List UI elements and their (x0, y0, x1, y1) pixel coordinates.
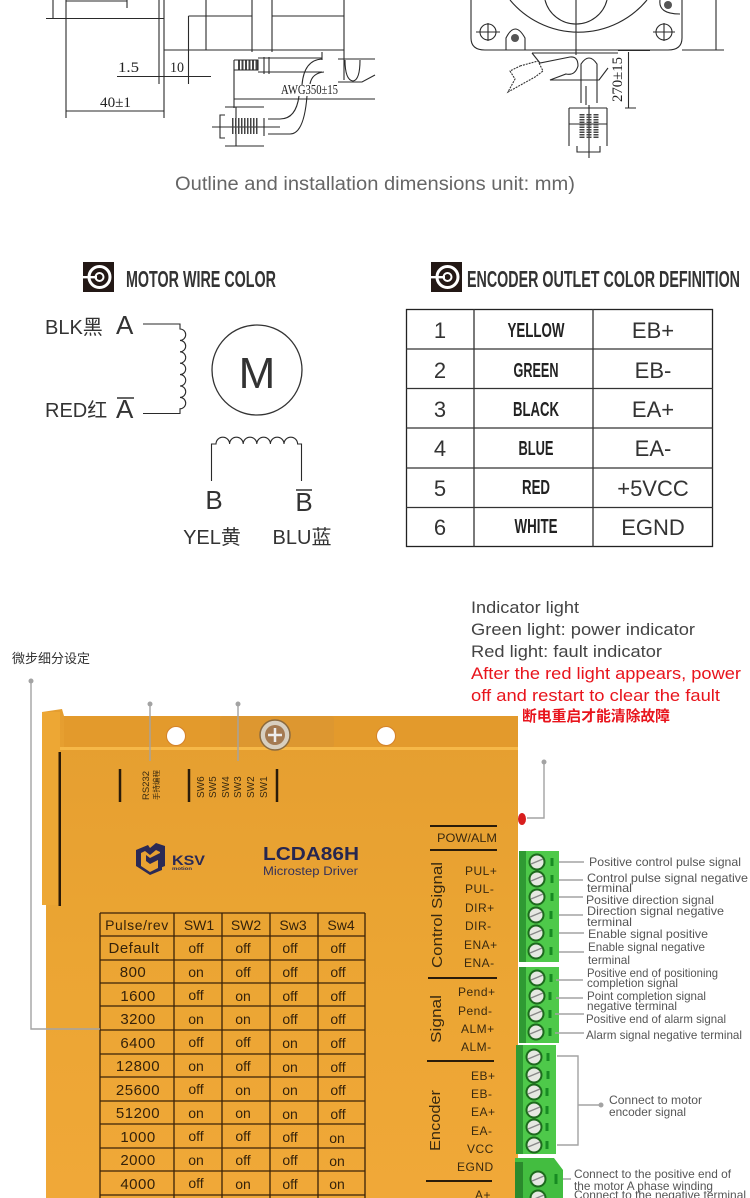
dimension: 40±1: 40±1 (100, 95, 131, 111)
indicator light notes: Indicator light (471, 598, 579, 617)
terminal labels on driver: Encoder (427, 1090, 444, 1151)
microstep table: on (282, 1059, 298, 1075)
terminal labels on driver: Signal (428, 995, 445, 1043)
microstep table: off (282, 988, 298, 1004)
microstep table: off (188, 940, 204, 956)
product subtitle: Microstep Driver (263, 866, 358, 878)
dimension: AWG350±15: AWG350±15 (281, 83, 338, 98)
encoder colour table: EB+ (632, 318, 674, 343)
microstep table: 1000 (120, 1129, 156, 1146)
terminal labels on driver: POW/ALM (437, 831, 497, 845)
encoder colour table: BLACK (513, 399, 559, 421)
terminal descriptions (574, 855, 748, 1198)
motor wiring diagram (45, 310, 331, 549)
screw (260, 720, 290, 750)
terminal labels on driver: PUL- (465, 882, 494, 896)
microstep table: 12800 (116, 1058, 160, 1075)
microstep table: off (330, 1035, 346, 1051)
microstep table: on (188, 964, 204, 980)
terminal descriptions: Positive direction signal (586, 893, 714, 907)
terminal labels on driver: DIR- (465, 919, 492, 933)
terminal descriptions: Enable signal negative (588, 940, 705, 954)
encoder colour table: RED (522, 477, 550, 499)
RS232 and switch labels: SW1 (259, 776, 270, 798)
dimension: 1.5: 1.5 (118, 60, 139, 76)
terminal labels on driver: PUL+ (465, 864, 497, 878)
microstep table: on (235, 1082, 251, 1098)
motor wiring diagram: A (116, 310, 134, 340)
technical drawing: motor front view (471, 0, 724, 158)
microstep table: off (188, 1175, 204, 1191)
terminal labels on driver: ENA+ (464, 938, 498, 952)
microstep table: off (330, 1106, 346, 1122)
microstep table: off (235, 1058, 251, 1074)
terminal labels on driver: Pend- (458, 1004, 493, 1018)
microstep table: on (282, 1106, 298, 1122)
mounting holes (166, 726, 396, 746)
motor wiring diagram: RED红 (45, 399, 107, 422)
microstep table: on (329, 1130, 345, 1146)
terminal descriptions: Direction signal negative (587, 904, 724, 918)
microstep table: off (235, 940, 251, 956)
microstep table: off (188, 987, 204, 1003)
motor symbol: M (239, 349, 275, 398)
terminal descriptions: encoder signal (609, 1105, 686, 1119)
encoder colour table (406, 309, 713, 547)
microstep table: SW1 (184, 917, 214, 933)
microstep table: on (188, 1152, 204, 1168)
microstep table: Pulse/rev (105, 917, 169, 933)
terminal descriptions: Alarm signal negative terminal (586, 1028, 742, 1042)
terminal descriptions: Connect to the positive end of (574, 1167, 732, 1181)
microstep table: off (282, 964, 298, 980)
KSV logo: motion (172, 866, 192, 871)
terminal labels on driver: EA+ (471, 1105, 496, 1119)
icon: motor wire color heading (83, 262, 114, 292)
terminal labels on driver: ALM+ (461, 1022, 495, 1036)
encoder colour table: 4 (434, 436, 446, 461)
indicator light notes: off and restart to clear the fault (471, 686, 720, 705)
terminal descriptions: Positive end of alarm signal (586, 1012, 726, 1026)
microstep table: off (188, 1081, 204, 1097)
microstep table: on (235, 1176, 251, 1192)
encoder colour table: EA+ (632, 397, 674, 422)
motor wiring diagram: YEL黄 (183, 526, 241, 549)
microstep table: SW2 (231, 917, 261, 933)
motor wiring diagram: B (295, 487, 313, 517)
microstep table: 2000 (120, 1152, 156, 1169)
microstep table: off (330, 1082, 346, 1098)
terminal labels on driver (426, 826, 498, 1198)
microstep table: Sw4 (327, 917, 355, 933)
terminal descriptions: Enable signal positive (588, 927, 708, 941)
terminal descriptions: Positive control pulse signal (589, 855, 741, 869)
terminal descriptions: Point completion signal (587, 989, 706, 1003)
terminal descriptions: terminal (588, 953, 630, 967)
terminal labels on driver: DIR+ (465, 901, 495, 915)
microstep table: on (282, 1082, 298, 1098)
terminal labels on driver: EB+ (471, 1069, 496, 1083)
product name: LCDA86H (263, 844, 359, 864)
terminal labels on driver: ENA- (464, 956, 495, 970)
motor wiring diagram: B (205, 485, 223, 515)
encoder colour table: 1 (434, 318, 446, 343)
leader lines (28, 678, 604, 1179)
RS232 and switch labels: SW4 (221, 776, 232, 798)
microstep table: off (330, 1011, 346, 1027)
indicator light notes: Green light: power indicator (471, 620, 695, 639)
terminal labels on driver: Control Signal (429, 862, 446, 968)
caption: outline and installation dimensions: Outline and installation dimensions unit: mm) (175, 174, 575, 195)
terminal descriptions: terminal (587, 915, 632, 929)
encoder colour table: GREEN (514, 360, 558, 382)
microstep table: 51200 (116, 1105, 160, 1122)
microstep table: on (282, 1035, 298, 1051)
microstep table: 4000 (120, 1176, 156, 1193)
microstep table: on (329, 1176, 345, 1192)
technical drawing: motor side view (46, 0, 375, 146)
microstep table: off (235, 1034, 251, 1050)
microstep table: off (330, 940, 346, 956)
motor symbol (212, 325, 302, 415)
encoder colour table: 5 (434, 476, 446, 501)
terminal descriptions: Positive end of positioning (587, 966, 718, 980)
RS232 and switch labels: RS232 (141, 771, 152, 800)
motor wiring diagram: A (116, 394, 134, 424)
KSV logo: KSV (172, 853, 205, 868)
microstep table: 800 (120, 964, 146, 981)
microstep table: off (235, 1152, 251, 1168)
driver housing (42, 709, 518, 1198)
terminal labels on driver: Pend+ (458, 985, 496, 999)
microstep table: on (329, 1153, 345, 1169)
green terminal blocks (515, 851, 563, 1198)
RS232 and switch labels: SW6 (196, 776, 207, 798)
microstep table: on (235, 1105, 251, 1121)
indicator light notes: Red light: fault indicator (471, 642, 662, 661)
RS232 and switch labels (120, 769, 277, 802)
microstep table: 1600 (120, 988, 156, 1005)
microstep table (100, 913, 365, 1198)
indicator light notes: After the red light appears, power (471, 664, 741, 683)
microstep table: off (330, 964, 346, 980)
microstep table: off (330, 988, 346, 1004)
RS232 and switch labels: SW2 (246, 776, 257, 798)
RS232 and switch labels: SW5 (208, 776, 219, 798)
terminal labels on driver: EA- (471, 1124, 493, 1138)
motor wiring diagram: BLK黑 (45, 317, 103, 339)
microstep table: on (188, 1058, 204, 1074)
encoder colour table: EGND (621, 515, 685, 540)
indicator light notes (471, 598, 741, 725)
encoder colour table: BLUE (518, 438, 554, 460)
terminal labels on driver: VCC (467, 1142, 494, 1156)
microstep table: off (282, 1011, 298, 1027)
terminal descriptions: negative terminal (587, 999, 677, 1013)
microstep table: 25600 (116, 1082, 160, 1099)
KSV logo (136, 843, 205, 875)
dimension: 270±15: 270±15 (610, 57, 626, 102)
red LED (518, 813, 526, 825)
label: microstep setting: 微步细分设定 (12, 651, 90, 666)
encoder colour table: 6 (434, 515, 446, 540)
microstep table: off (282, 1176, 298, 1192)
microstep table: off (188, 1034, 204, 1050)
terminal descriptions: Control pulse signal negative (587, 871, 748, 885)
encoder colour table: 2 (434, 358, 446, 383)
microstep table: off (282, 1129, 298, 1145)
microstep table: 3200 (120, 1011, 156, 1028)
microstep table: on (235, 988, 251, 1004)
encoder colour table: EB- (635, 358, 671, 383)
terminal labels on driver: EB- (471, 1087, 493, 1101)
terminal descriptions: Connect to motor (609, 1093, 702, 1107)
encoder colour table: +5VCC (617, 476, 689, 501)
encoder colour table: WHITE (514, 516, 558, 538)
encoder colour table: 3 (434, 397, 446, 422)
microstep table: off (330, 1059, 346, 1075)
microstep table: off (235, 964, 251, 980)
RS232 and switch labels: 手持编程 (151, 770, 161, 800)
terminal descriptions: completion signal (587, 976, 678, 990)
terminal labels on driver: ALM- (461, 1040, 492, 1054)
microstep table: off (282, 1152, 298, 1168)
microstep table: Sw3 (279, 917, 307, 933)
microstep table: Default (108, 940, 160, 957)
terminal descriptions: the motor A phase winding (574, 1179, 713, 1193)
terminal descriptions: terminal (587, 881, 632, 895)
heading: motor wire color: MOTOR WIRE COLOR (126, 266, 276, 292)
microstep table: off (235, 1128, 251, 1144)
microstep table: on (235, 1011, 251, 1027)
indicator light notes: 断电重启才能清除故障 (522, 707, 670, 725)
encoder colour table: EA- (635, 436, 671, 461)
microstep table: on (188, 1105, 204, 1121)
motor wiring diagram: BLU蓝 (273, 526, 331, 549)
RS232 and switch labels: SW3 (233, 776, 244, 798)
microstep table: off (188, 1128, 204, 1144)
encoder colour table: YELLOW (508, 320, 565, 342)
microstep table: on (188, 1011, 204, 1027)
microstep table: off (282, 940, 298, 956)
terminal labels on driver: EGND (457, 1160, 494, 1174)
icon: encoder heading (431, 262, 462, 292)
dimension: 10: 10 (170, 60, 184, 76)
microstep table: 6400 (120, 1035, 156, 1052)
